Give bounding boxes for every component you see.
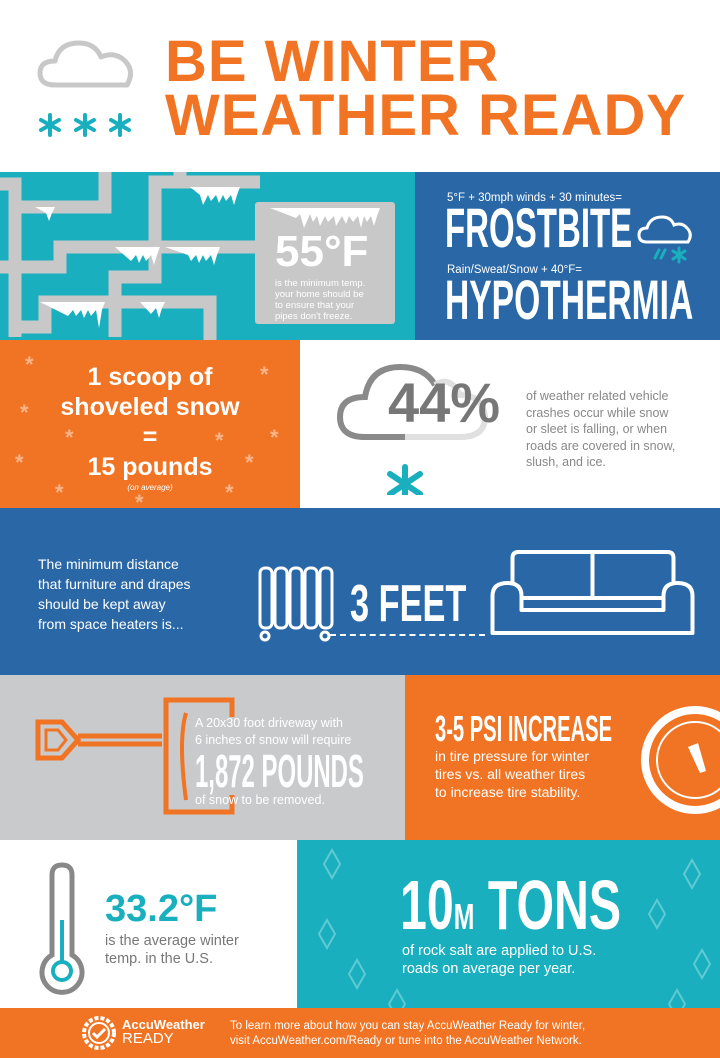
panel: frostbite hypothermia: 5°F + 30mph winds + 30 minutes= (447, 192, 622, 204)
panel: space heaters 3 feet (0, 508, 720, 675)
panel: space heaters 3 feet: from space heaters is... (38, 616, 184, 632)
decorative snowflakes: * (55, 480, 64, 505)
panel: shoveled snow (0, 340, 300, 508)
decorative snowflakes: * (270, 425, 279, 450)
panel: space heaters 3 feet: 3 FEET (350, 575, 466, 633)
decorative snowflakes: * (20, 400, 29, 425)
stat: 55F: to ensure that your (275, 300, 354, 311)
decorative snowflakes: * (25, 352, 34, 377)
panel: driveway shovel: 6 inches of snow will require (195, 733, 351, 747)
title (165, 29, 686, 148)
panel: space heaters 3 feet: that furniture and drapes (38, 576, 191, 592)
text: of weather related vehicle (526, 389, 668, 403)
panel: thermometer 33.2F: is the average winter (105, 933, 239, 949)
text: slush, and ice. (526, 455, 606, 469)
stat text: 15 pounds (87, 453, 212, 481)
panel: tire pressure: tires vs. all weather tires (435, 766, 585, 782)
icon: gauge (641, 706, 720, 814)
icon: small cloud (638, 216, 692, 264)
stat text (60, 363, 240, 481)
title: BE WINTER (165, 29, 499, 94)
panel: driveway shovel: of snow to be removed. (195, 793, 325, 807)
panel: driveway shovel: A 20x30 foot driveway with (195, 716, 343, 730)
panel: tire pressure: in tire pressure for winter (435, 748, 589, 764)
icon: ready badge (82, 1016, 116, 1050)
icon: heater (258, 566, 334, 642)
decorative snowflakes: * (260, 362, 269, 387)
panel: rock salt: of rock salt are applied to U.S. (402, 943, 596, 959)
icon: shovel (36, 698, 234, 814)
icon: thermometer (39, 862, 84, 995)
stat: 55F: is the minimum temp. (275, 278, 365, 289)
icon: cloud snowflake (337, 364, 488, 495)
decorative snowflakes: * (15, 450, 24, 475)
icon: sofa (490, 550, 694, 635)
decorative snowflakes: * (245, 450, 254, 475)
panel: space heaters 3 feet: should be kept away (38, 596, 166, 612)
panel: thermometer 33.2F: 33.2°F (105, 888, 217, 930)
panel: frostbite hypothermia: FROSTBITE (445, 196, 632, 259)
footer (0, 1008, 720, 1058)
pipes illustration (0, 172, 395, 340)
text: crashes occur while snow (526, 406, 668, 420)
decorative snowflakes: * (215, 428, 224, 453)
stat: 55F: pipes don't freeze. (275, 311, 352, 322)
text: roads are covered in snow, (526, 438, 675, 452)
text (526, 389, 675, 469)
footer: visit AccuWeather.com/Ready or tune into the AccuWeather Network. (230, 1035, 582, 1047)
text: or sleet is falling, or when (526, 422, 667, 436)
panel: tire pressure: to increase tire stability. (435, 784, 580, 800)
panel: 44% crashes (300, 340, 720, 508)
panel: thermometer 33.2F: temp. in the U.S. (105, 951, 213, 967)
title: WEATHER READY (165, 83, 686, 148)
panel: frostbite hypothermia: HYPOTHERMIA (445, 268, 693, 331)
footer: To learn more about how you can stay AccuWeather Ready for winter, (230, 1020, 585, 1032)
stat text: = (143, 423, 157, 451)
panel: 44% crashes: 44% (388, 371, 500, 434)
decorative snowflakes: * (65, 425, 74, 450)
panel: thermometer 33.2F (0, 840, 297, 1008)
panel: pipes 55F (0, 172, 415, 340)
panel: space heaters 3 feet: The minimum distance (38, 556, 179, 572)
panel: rock salt: 10M TONS (400, 866, 621, 944)
decorative diamonds (318, 848, 711, 1008)
icon: cloud with snow (38, 40, 134, 137)
stat: 55F (275, 227, 368, 322)
panel: rock salt: roads on average per year. (402, 961, 575, 977)
panel: frostbite hypothermia (415, 172, 720, 340)
decorative snowflakes: * (135, 490, 144, 515)
panel: driveway shovel (0, 675, 405, 840)
panel: tire pressure (405, 675, 720, 840)
stat: 55F: your home should be (275, 289, 364, 300)
header (0, 0, 720, 172)
panel: driveway shovel: 1,872 POUNDS (195, 745, 364, 797)
panel: frostbite hypothermia: Rain/Sweat/Snow + 40°F= (447, 264, 582, 276)
footer: READY (122, 1030, 174, 1047)
stat text: shoveled snow (60, 393, 240, 421)
stat text: 1 scoop of (87, 363, 212, 391)
panel: tire pressure: 3-5 PSI INCREASE (435, 708, 612, 749)
footer: AccuWeather (122, 1017, 205, 1032)
panel: shoveled snow: (on average) (127, 483, 173, 492)
stat: 55F: 55°F (275, 227, 368, 276)
panel: rock salt (297, 840, 720, 1008)
decorative snowflakes: * (225, 480, 234, 505)
decorative snowflakes (15, 352, 279, 515)
